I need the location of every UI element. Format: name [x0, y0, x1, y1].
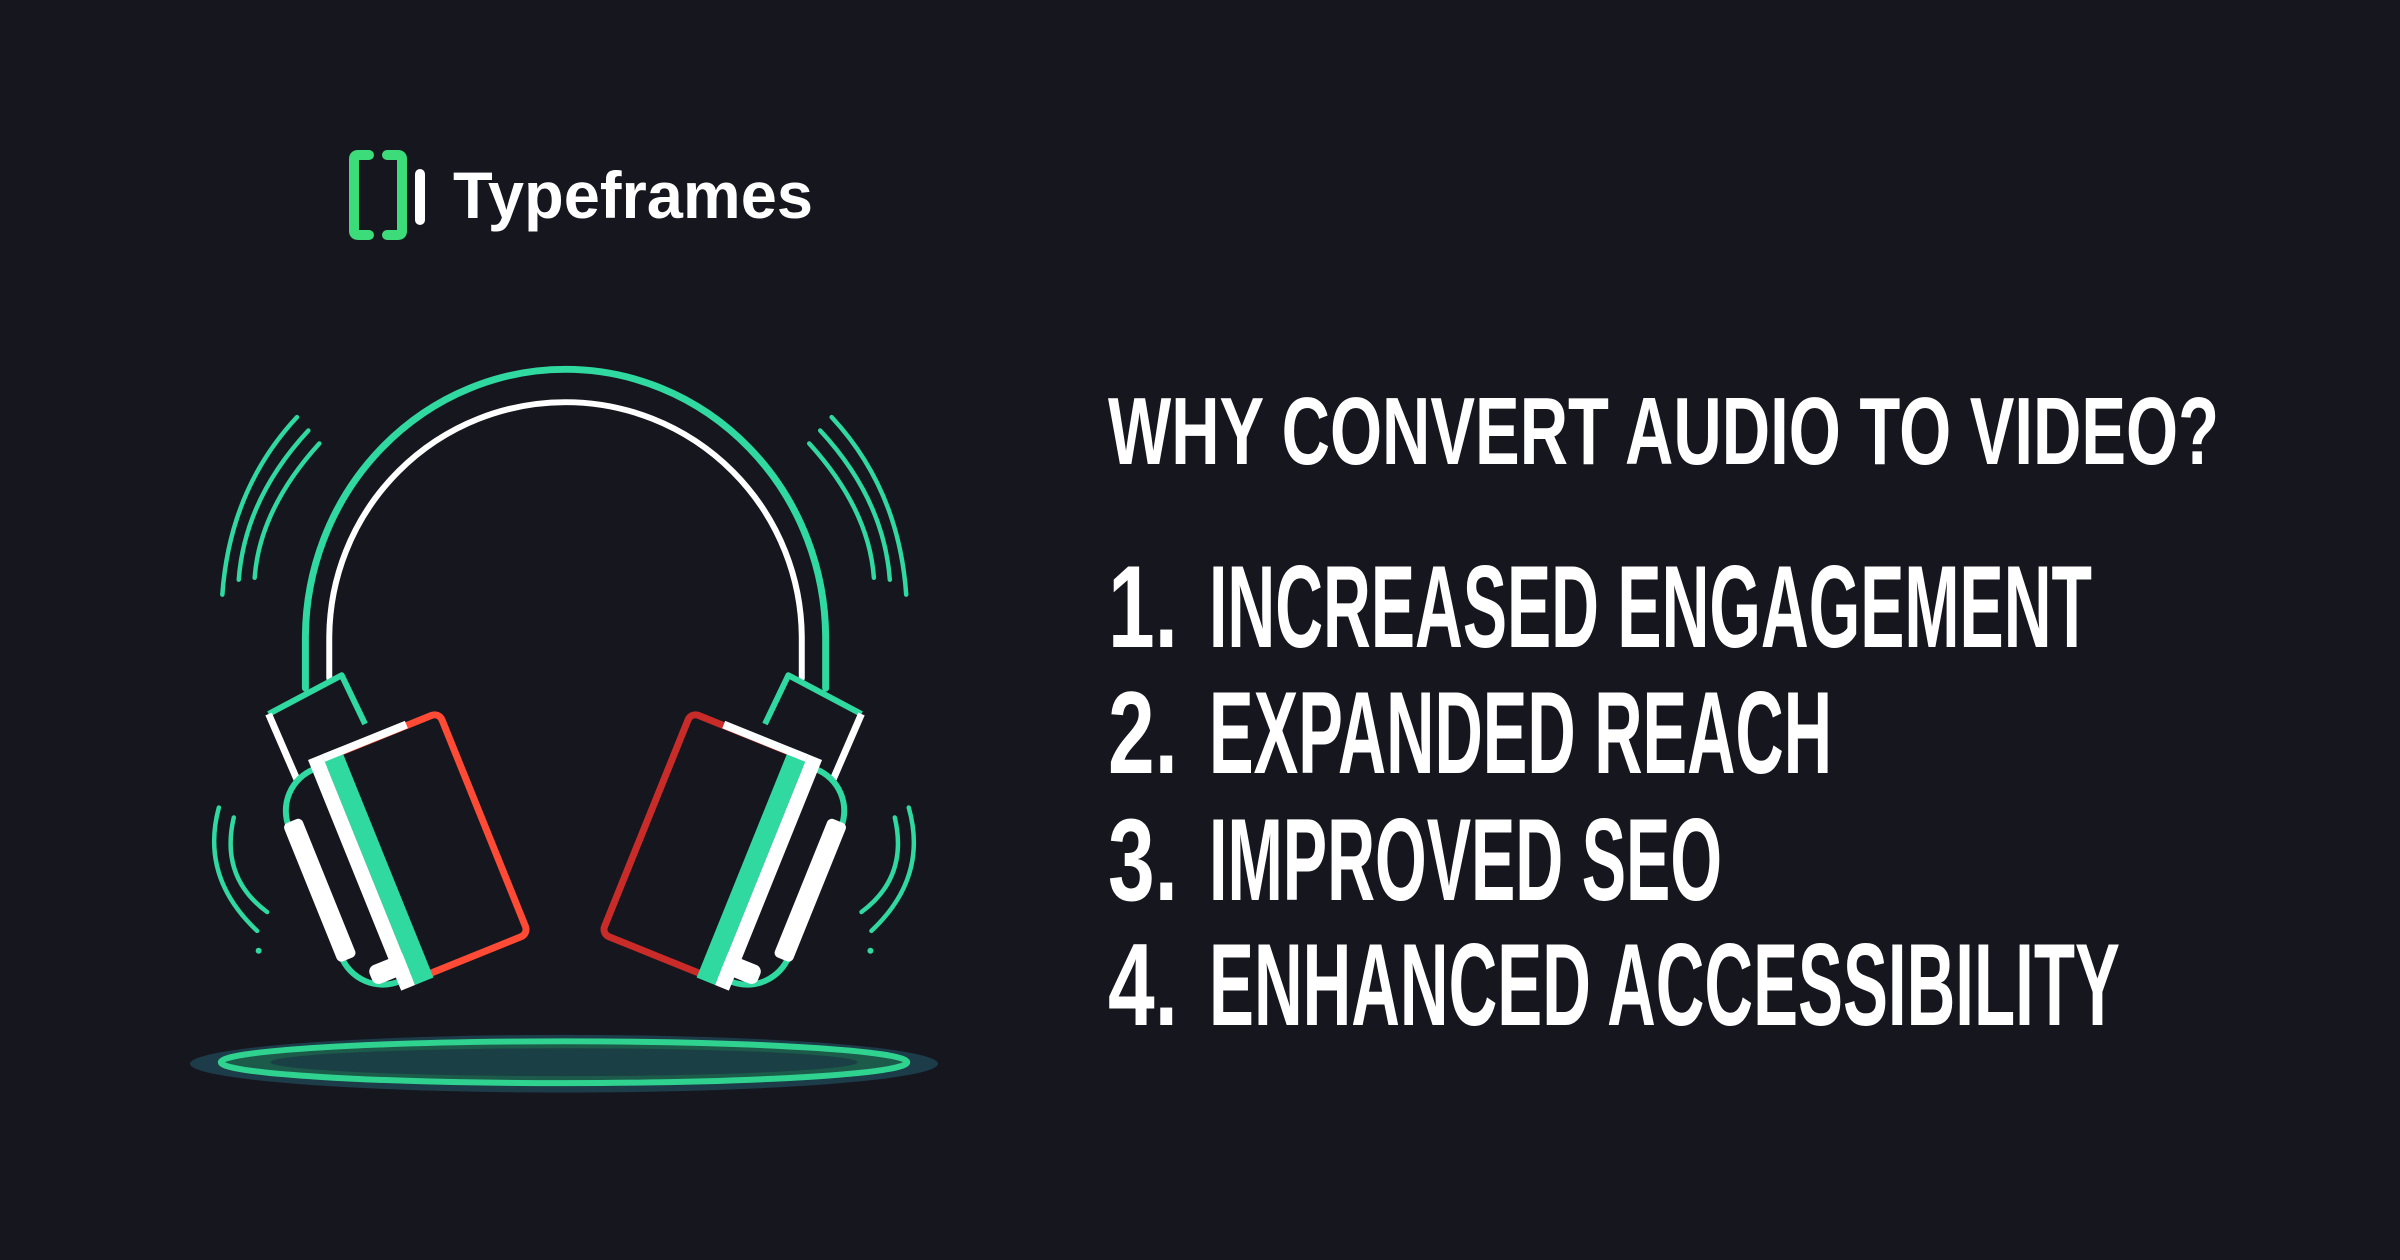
list item 3: 3. [1108, 794, 1178, 925]
sound waves [214, 417, 914, 954]
illustration: headphones [190, 366, 938, 1092]
list item 3: IMPROVED SEO [1209, 794, 1722, 925]
logo [349, 150, 813, 240]
text block [1108, 378, 2219, 1050]
list item 2: 2. [1108, 667, 1178, 798]
icon: logo brackets [354, 155, 425, 235]
list item 2 [1108, 667, 1832, 798]
left earcup [268, 675, 530, 1000]
headband [305, 369, 826, 688]
list item 3 [1108, 794, 1722, 925]
platform glow [190, 1035, 938, 1093]
right earcup [600, 675, 862, 1000]
logo text: Typeframes [453, 158, 813, 232]
list item 4: 4. [1108, 919, 1178, 1050]
list item 1: 1. [1108, 541, 1178, 672]
